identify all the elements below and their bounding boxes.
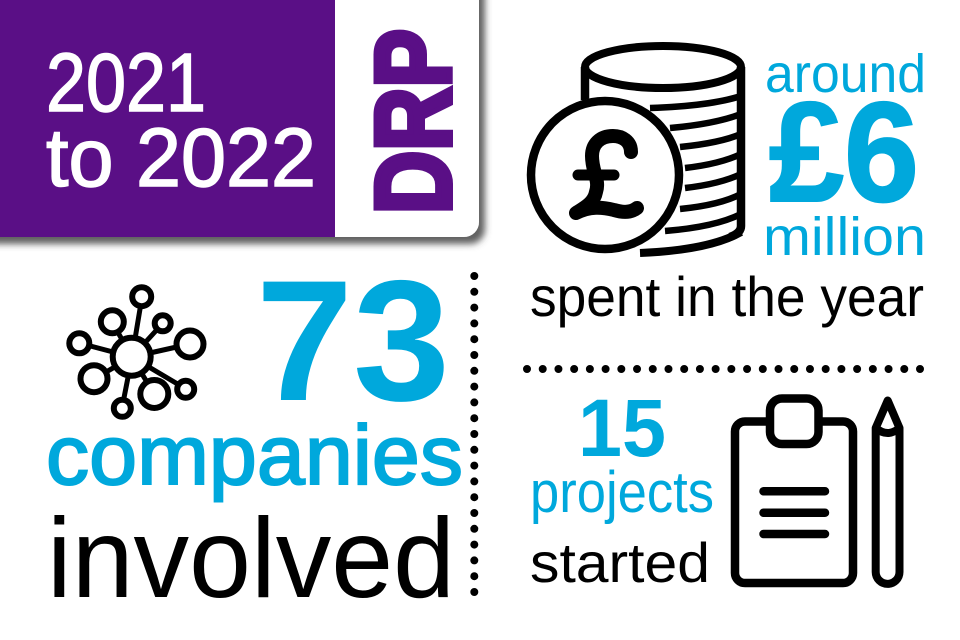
vertical dotted divider [470,276,478,597]
icon: network [69,287,204,417]
pound symbol [576,136,637,213]
text: companies: companies [46,408,463,502]
coin stack [585,46,741,253]
heading: years: to 2022 [46,111,316,204]
panel: title card [0,0,479,237]
heading: years: 2021 [46,36,206,129]
icon: coin stack with pound [531,46,741,253]
front coin [531,101,679,249]
text: projects: projects [530,460,714,525]
heading: years [46,36,316,204]
text: around £6 million [763,44,926,267]
text: involved: involved [47,495,455,621]
card background [0,0,479,237]
text: spent in the year: spent in the year [530,265,924,328]
icon: pencil [876,400,900,584]
text: around £6 million: million [763,207,926,267]
text: around £6 million: £6 [769,73,919,232]
icon: clipboard [735,398,853,583]
purple title panel [0,0,335,237]
number: 15: 15 [578,383,666,474]
horizontal dotted divider [527,365,922,373]
text: started: started [530,531,710,594]
text: around £6 million: around [765,44,926,104]
number: 73: 73 [256,245,450,437]
